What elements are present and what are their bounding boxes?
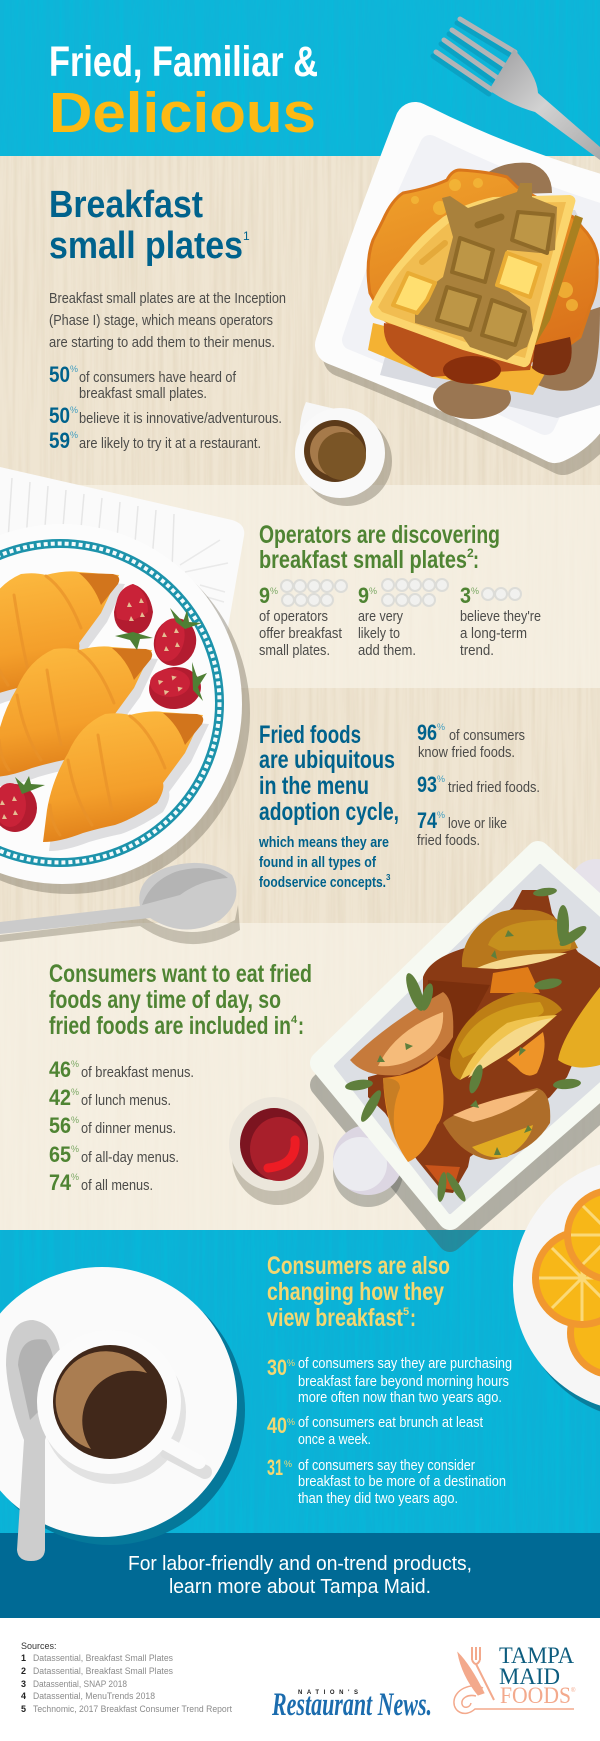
logo: Nation's Restaurant News: Restaurant News. [271, 1687, 432, 1723]
illustration: ketchup cup [229, 1097, 324, 1205]
stats: view of breakfast: breakfast to be more of a destination [298, 1473, 506, 1490]
heading: consumers want fried foods: foods any time of day, so [49, 986, 281, 1014]
stat: nine percent likely [358, 579, 448, 659]
sources: Datassential, SNAP 2018 [33, 1679, 127, 1689]
stats: view of breakfast: 31 [267, 1455, 283, 1480]
potato wedges [350, 909, 600, 1162]
stats: view of breakfast: % [284, 1459, 292, 1469]
background: wood table [0, 156, 600, 1230]
heading: fried foods ubiquitous: foodservice concepts. [259, 874, 386, 891]
stats: fried food awareness: % [437, 774, 445, 784]
heading: breakfast small plates: 1 [243, 229, 250, 243]
title [49, 38, 318, 145]
heading: changing how they view breakfast: Consumers are also [267, 1252, 450, 1280]
waffle [370, 195, 575, 367]
stat: nine percent offer [259, 580, 347, 659]
stats: menu penetration: of all menus. [81, 1177, 153, 1194]
text block: inception stage: (Phase I) stage, which means operators [49, 312, 273, 329]
logo: Tampa Maid Foods [454, 1643, 576, 1713]
strawberry four [0, 776, 45, 832]
stat: nine percent offer: % [270, 586, 278, 596]
sources: Datassential, MenuTrends 2018 [33, 1691, 155, 1701]
sources: 3 [21, 1679, 26, 1689]
illustration: orange slices plate [513, 1158, 600, 1420]
stats: consumer awareness: % [70, 430, 78, 440]
text block: inception stage: are starting to add them to their menus. [49, 334, 275, 351]
logo: Tampa Maid Foods: ® [571, 1687, 576, 1694]
heading: fried foods ubiquitous: found in all types of [259, 854, 377, 871]
stats: menu penetration: % [71, 1087, 79, 1097]
stats: menu penetration: % [71, 1144, 79, 1154]
stats: consumer awareness [49, 362, 282, 453]
heading: fried foods ubiquitous: adoption cycle, [259, 798, 399, 826]
illustration: fork [433, 19, 600, 160]
stats: fried food awareness: % [437, 722, 445, 732]
stat: nine percent offer: small plates. [259, 642, 330, 659]
heading: breakfast small plates: small plates [49, 225, 243, 267]
stat: three percent trend: trend. [460, 642, 494, 659]
stats: consumer awareness: believe it is innovative/adventurous. [79, 410, 282, 427]
heading: fried foods ubiquitous [258, 721, 399, 891]
stat: three percent trend: 3 [460, 583, 471, 608]
stat: three percent trend [460, 583, 541, 659]
illustration: coffee cup and saucer [0, 1267, 245, 1561]
heading: breakfast small plates [49, 184, 250, 267]
heading: operators: : [473, 546, 479, 574]
logo: Nation's Restaurant News: NATION'S [298, 1690, 358, 1696]
stats: consumer awareness: 59 [49, 428, 70, 453]
stat: nine percent likely: 9 [358, 583, 369, 608]
stats: fried food awareness: tried fried foods. [448, 779, 540, 796]
orange slice bottom [567, 1288, 600, 1378]
stats: fried food awareness: love or like [448, 815, 507, 832]
heading: fried foods ubiquitous: Fried foods [259, 721, 361, 749]
croissant three [43, 711, 209, 851]
sources: 4 [21, 1691, 26, 1701]
sources: 1 [21, 1653, 26, 1663]
heading: fried foods ubiquitous: are ubiquitous [259, 746, 395, 774]
heading: fried foods ubiquitous: 3 [386, 873, 391, 882]
stats: view of breakfast: of consumers say they consider [298, 1457, 475, 1474]
stats: menu penetration [49, 1057, 194, 1195]
sources: Datassential, Breakfast Small Plates [33, 1653, 173, 1663]
call to action [128, 1553, 472, 1598]
stats: view of breakfast [267, 1355, 512, 1507]
stat: nine percent offer: 9 [259, 583, 270, 608]
background: blue section [0, 1230, 600, 1533]
stats: view of breakfast: % [287, 1358, 295, 1368]
stats: fried food awareness: of consumers [449, 727, 525, 744]
stat: three percent trend: % [471, 586, 479, 596]
stats: consumer awareness: % [70, 405, 78, 415]
stats: view of breakfast: 30 [267, 1355, 287, 1380]
stat: three percent trend: believe they're [460, 608, 541, 625]
icon: nine plates [382, 579, 448, 606]
heading: changing how they view breakfast: 5 [403, 1306, 409, 1318]
title: Delicious [49, 81, 316, 145]
stats: consumer awareness: breakfast small plates. [79, 385, 207, 402]
stats: menu penetration: of dinner menus. [81, 1120, 176, 1137]
stats: fried food awareness: % [437, 810, 445, 820]
background: light band one [0, 485, 600, 688]
call to action: For labor-friendly and on-trend products, [128, 1553, 472, 1575]
stats: view of breakfast: more often now than two years ago. [298, 1389, 502, 1406]
stats: view of breakfast: of consumers eat brunch at least [298, 1414, 484, 1431]
stats: menu penetration: 65 [49, 1142, 71, 1167]
title: Fried, Familiar & [49, 38, 318, 86]
background: blue header [0, 0, 600, 156]
stats: fried food awareness: 96 [417, 720, 437, 745]
stats: consumer awareness: are likely to try it at a restaurant. [79, 435, 261, 452]
stats: view of breakfast: of consumers say they are purchasing [298, 1355, 512, 1372]
stats: view of breakfast: than they did two years ago. [298, 1490, 458, 1507]
syrup [415, 183, 557, 360]
heading: consumers want fried foods [49, 960, 312, 1040]
stats: menu penetration: of breakfast menus. [81, 1064, 194, 1081]
stats: fried food awareness [417, 720, 540, 849]
stats: menu penetration: % [71, 1115, 79, 1125]
stat: nine percent offer: of operators [259, 608, 328, 625]
heading: changing how they view breakfast: view breakfast [267, 1304, 404, 1332]
stats: consumer awareness: of consumers have heard of [79, 369, 237, 386]
spoon [6, 1320, 61, 1561]
stat: nine percent likely: add them. [358, 642, 416, 659]
heading: changing how they view breakfast [267, 1252, 450, 1332]
icon: knife, fork and swirl [454, 1647, 574, 1713]
stats: menu penetration: % [71, 1172, 79, 1182]
illustration: creamer cup [295, 402, 392, 506]
stat: three percent trend: a long-term [460, 625, 527, 642]
background: light band two [0, 923, 600, 1230]
stats: fried food awareness: know fried foods. [418, 744, 515, 761]
heading: operators: Operators are discovering [259, 521, 500, 549]
stats: menu penetration: of all-day menus. [81, 1149, 179, 1166]
sources: 2 [21, 1666, 26, 1676]
heading: fried foods ubiquitous: in the menu [259, 772, 369, 800]
orange slice top [564, 1187, 600, 1283]
heading: consumers want fried foods: 4 [291, 1014, 298, 1026]
stats: view of breakfast: once a week. [298, 1431, 371, 1448]
croissant one [0, 571, 125, 711]
heading: breakfast small plates: Breakfast [49, 184, 203, 226]
stat: nine percent likely: % [369, 586, 377, 596]
waffle cells [393, 212, 553, 345]
heading: changing how they view breakfast: changing how they [267, 1278, 444, 1306]
cheese and sausage [368, 323, 547, 395]
illustration: spoon [0, 863, 240, 944]
herb leaves [344, 886, 589, 1204]
stats: consumer awareness: % [70, 364, 78, 374]
stats: menu penetration: 56 [49, 1113, 71, 1138]
patty [368, 170, 598, 362]
stats: fried food awareness: 74 [417, 808, 438, 833]
stat: nine percent likely: likely to [358, 625, 400, 642]
strawberry one [114, 584, 153, 650]
logo: Tampa Maid Foods: TAMPA [499, 1643, 574, 1668]
stats: fried food awareness: 93 [417, 772, 437, 797]
text block: inception stage [49, 290, 286, 351]
heading: operators: 2 [467, 546, 474, 560]
stats: fried food awareness: fried foods. [417, 832, 480, 849]
stats: menu penetration: 42 [49, 1085, 71, 1110]
icon: three plates [482, 588, 521, 600]
sources: Sources: [21, 1641, 57, 1651]
stats: view of breakfast: % [287, 1417, 295, 1427]
potato mass [368, 890, 600, 1193]
heading: consumers want fried foods: fried foods are included in [49, 1012, 291, 1040]
sources: Technomic, 2017 Breakfast Consumer Trend Report [33, 1704, 232, 1714]
stats: view of breakfast: breakfast fare beyond morning hours [298, 1373, 509, 1390]
icon: nine plates [281, 580, 347, 606]
illustration: potato dish [322, 853, 600, 1240]
background: dark blue call to action band [0, 1533, 600, 1618]
heading: consumers want fried foods: : [298, 1012, 304, 1040]
stats: menu penetration: of lunch menus. [81, 1092, 171, 1109]
illustration: waffle plate [335, 122, 600, 455]
stats: consumer awareness: 50 [49, 362, 70, 387]
strawberry two [149, 608, 202, 671]
heading: fried foods ubiquitous: which means they are [258, 834, 389, 851]
sources: 5 [21, 1704, 26, 1714]
call to action: learn more about Tampa Maid. [169, 1576, 431, 1598]
logo: Tampa Maid Foods: MAID [499, 1664, 560, 1689]
food shadow [380, 210, 600, 418]
stats: view of breakfast: 40 [267, 1413, 287, 1438]
sources [21, 1641, 232, 1714]
stats: menu penetration: 74 [49, 1170, 72, 1195]
heading: consumers want fried foods: Consumers want to eat fried [49, 960, 312, 988]
logo: Nation's Restaurant News [271, 1687, 432, 1723]
illustration: croissant plate [0, 524, 250, 894]
gravy blobs [433, 163, 600, 419]
croissant two [0, 646, 158, 786]
background: white footer [0, 1618, 600, 1741]
stats: consumer awareness: 50 [49, 403, 70, 428]
stat: nine percent likely: are very [358, 608, 403, 625]
stat: nine percent offer: offer breakfast [259, 625, 343, 642]
logo: Tampa Maid Foods: FOODS [500, 1683, 571, 1708]
text block: inception stage: Breakfast small plates are at the Inception [49, 290, 286, 307]
sources: Datassential, Breakfast Small Plates [33, 1666, 173, 1676]
heading: operators: breakfast small plates [259, 546, 467, 574]
heading: changing how they view breakfast: : [410, 1304, 416, 1332]
illustration: napkin [0, 467, 244, 650]
orange slice middle [532, 1228, 600, 1328]
stats: menu penetration: % [71, 1059, 79, 1069]
strawberry three [147, 662, 207, 711]
heading: operators [259, 521, 500, 574]
stats: menu penetration: 46 [49, 1057, 71, 1082]
